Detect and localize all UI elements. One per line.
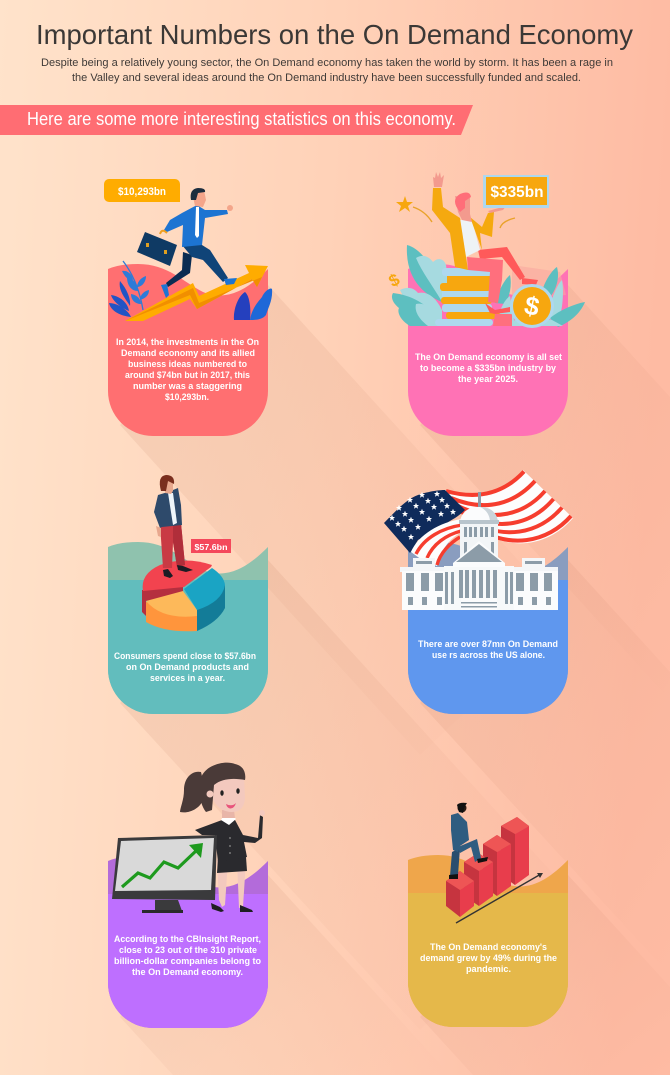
illustration: woman on pie chart: [142, 475, 225, 631]
card background: [108, 542, 268, 714]
panel: investments: [104, 179, 272, 436]
card text: business ideas numbered to: [128, 359, 247, 369]
panel: consumer spending: [108, 475, 268, 714]
illustration: flag and capitol: [384, 470, 573, 610]
illustration: woman with monitor: [112, 763, 265, 913]
illustration: man climbing bars: [446, 803, 543, 923]
price tag: $57.6bn: [194, 542, 228, 552]
illustration: man on coins: $: [386, 270, 403, 291]
card background: [408, 264, 568, 436]
card text: The On Demand economy is all set: [415, 352, 562, 362]
card text: on On Demand products and: [126, 662, 249, 672]
card text: number was a staggering: [133, 381, 242, 391]
price sign: [483, 175, 549, 208]
card text: [114, 651, 256, 683]
card background: [108, 856, 268, 1028]
card text: pandemic.: [466, 964, 511, 974]
banner: Here are some more interesting statistics on this economy.: [27, 109, 456, 129]
price tag: [191, 539, 231, 553]
card text: In 2014, the investments in the On: [116, 337, 259, 347]
card text: [418, 639, 558, 660]
card text: around $74bn but in 2017, this: [125, 370, 250, 380]
card background: [408, 855, 568, 1027]
panel: 335bn forecast: [386, 172, 585, 436]
card background: [108, 264, 268, 436]
title: Important Numbers on the On Demand Economy: [36, 19, 633, 50]
card text: use rs across the US alone.: [432, 650, 545, 660]
card text: close to 23 out of the 310 private: [119, 945, 257, 955]
card text: [114, 934, 261, 977]
card background: [408, 542, 568, 714]
card text: $10,293bn.: [165, 392, 209, 402]
illustration: man on coins: $: [522, 290, 543, 322]
price sign: $335bn: [490, 184, 544, 201]
card text: [420, 942, 557, 974]
intro text: [41, 57, 613, 84]
banner: [0, 105, 473, 135]
card text: Demand economy and its allied: [121, 348, 255, 358]
card text: [116, 337, 259, 402]
intro text: Despite being a relatively young sector, the On Demand economy has taken the world by storm. It has been a rage in: [41, 57, 613, 69]
card text: [415, 352, 562, 384]
card text: services in a year.: [150, 673, 225, 683]
price tag: $10,293bn: [118, 186, 166, 198]
price tag: [104, 179, 180, 202]
card text: the year 2025.: [458, 374, 518, 384]
card text: The On Demand economy's: [430, 942, 547, 952]
illustration: man on coins: [386, 172, 585, 328]
illustration: businessman on rising arrow: [109, 188, 272, 321]
panel: billion-dollar companies: [108, 763, 268, 1028]
card text: the On Demand economy.: [132, 967, 243, 977]
card text: There are over 87mn On Demand: [418, 639, 558, 649]
card text: demand grew by 49% during the: [420, 953, 557, 963]
card text: According to the CBInsight Report,: [114, 934, 261, 944]
intro text: the Valley and several ideas around the On Demand industry have been successfully funded and scaled.: [72, 72, 581, 84]
card text: Consumers spend close to $57.6bn: [114, 651, 256, 661]
panel: demand growth: [408, 803, 568, 1027]
panel: US users: [384, 470, 573, 714]
card text: billion-dollar companies belong to: [114, 956, 261, 966]
card text: to become a $335bn industry by: [420, 363, 556, 373]
